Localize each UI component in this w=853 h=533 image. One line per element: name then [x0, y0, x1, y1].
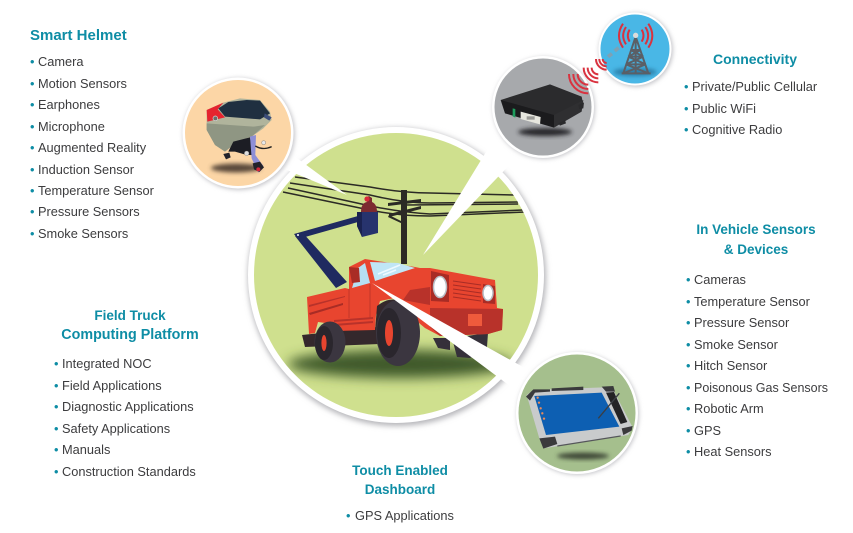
- text block: In Vehicle Sensors and Devices: Hitch Sensor: [694, 358, 768, 373]
- text block: Field Truck Computing Platform: •: [54, 356, 58, 371]
- text block: Touch Enabled Dashboard: GPS Applications: [355, 508, 454, 523]
- chassis: [302, 327, 380, 347]
- bucket: [357, 212, 378, 237]
- power lines: [283, 177, 525, 216]
- text block: In Vehicle Sensors and Devices: •: [686, 444, 690, 459]
- far front wheels: [433, 333, 488, 358]
- text block: In Vehicle Sensors and Devices: •: [686, 401, 690, 416]
- text block: In Vehicle Sensors and Devices: •: [686, 380, 690, 395]
- pointer: tablet to truck: [372, 283, 532, 392]
- icon: vehicle gateway device circle: [492, 56, 595, 159]
- text block: Smart Helmet: [30, 27, 155, 241]
- rear wheel: [314, 322, 346, 362]
- text block: In Vehicle Sensors and Devices: Smoke Sensor: [694, 337, 779, 352]
- text block: In Vehicle Sensors and Devices: •: [686, 272, 690, 287]
- text block: Field Truck Computing Platform: Field Applications: [62, 378, 162, 393]
- text block: Connectivity: •: [684, 101, 688, 116]
- text block: Touch Enabled Dashboard: Touch Enabled: [352, 463, 448, 478]
- text block: Connectivity: •: [684, 79, 688, 94]
- worker: [361, 196, 377, 212]
- text block: Field Truck Computing Platform: Integrated NOC: [62, 356, 152, 371]
- boom arm: [294, 216, 358, 288]
- text block: In Vehicle Sensors and Devices: Heat Sensors: [694, 444, 772, 459]
- text block: In Vehicle Sensors and Devices: •: [686, 337, 690, 352]
- text block: Field Truck Computing Platform: Construction Standards: [62, 464, 196, 479]
- grille bars: [453, 281, 481, 301]
- text block: In Vehicle Sensors and Devices: Cameras: [694, 272, 746, 287]
- text block: Smart Helmet: •: [30, 76, 34, 91]
- text block: Field Truck Computing Platform: Diagnostic Applications: [62, 399, 194, 414]
- button strip: [606, 392, 627, 424]
- central illustration: bucket truck in green circle: [248, 127, 546, 426]
- text block: In Vehicle Sensors and Devices: Robotic Arm: [694, 401, 764, 416]
- front wheel: [376, 300, 420, 366]
- text block: In Vehicle Sensors and Devices: Pressure Sensor: [694, 315, 790, 330]
- icon: rugged tablet circle: [516, 352, 639, 475]
- text block: Connectivity: Cognitive Radio: [692, 122, 782, 137]
- windshield: [370, 262, 415, 281]
- wheel arch: [375, 299, 420, 332]
- text block: Smart Helmet: Temperature Sensor: [38, 183, 155, 198]
- text block: Smart Helmet: •: [30, 226, 34, 241]
- text block: Smart Helmet: •: [30, 140, 34, 155]
- text block: Field Truck Computing Platform: •: [54, 378, 58, 393]
- utility pole: [388, 190, 421, 264]
- darker red panels: [430, 308, 503, 336]
- text block: Field Truck Computing Platform: •: [54, 464, 58, 479]
- headlights: [434, 276, 446, 298]
- text block: In Vehicle Sensors and Devices: •: [686, 423, 690, 438]
- text block: Touch Enabled Dashboard: Dashboard: [365, 482, 435, 497]
- text block: Smart Helmet: Induction Sensor: [38, 162, 135, 177]
- text block: Smart Helmet: Motion Sensors: [38, 76, 127, 91]
- text block: In Vehicle Sensors and Devices: Temperature Sensor: [694, 294, 811, 309]
- text block: Field Truck Computing Platform: Computing Platform: [61, 327, 199, 343]
- text block: Touch Enabled Dashboard: •: [346, 508, 350, 523]
- text block: In Vehicle Sensors and Devices: •: [686, 315, 690, 330]
- text block: Connectivity: Connectivity: [713, 51, 797, 67]
- grille frame: [431, 271, 449, 302]
- text block: Field Truck Computing Platform: •: [54, 442, 58, 457]
- text block: In Vehicle Sensors and Devices: & Devices: [724, 242, 788, 257]
- license plate: [468, 314, 482, 326]
- text block: Connectivity: Public WiFi: [692, 101, 756, 116]
- text block: In Vehicle Sensors and Devices: In Vehicle Sensors: [696, 222, 816, 237]
- text block: Connectivity: [684, 51, 818, 137]
- text block: Field Truck Computing Platform: Field Truck: [94, 308, 166, 323]
- icon: cell tower circle: [598, 12, 673, 87]
- text block: In Vehicle Sensors and Devices: [686, 222, 828, 459]
- pointer: device to truck: [423, 134, 520, 255]
- text block: Smart Helmet: Earphones: [38, 97, 100, 112]
- tower: [622, 37, 651, 73]
- text block: Smart Helmet: Microphone: [38, 119, 105, 134]
- text block: Field Truck Computing Platform: [54, 308, 199, 479]
- text block: Smart Helmet: Smart Helmet: [30, 27, 127, 44]
- text block: Smart Helmet: •: [30, 204, 34, 219]
- truck body: [307, 259, 503, 336]
- tower signal waves: [619, 24, 652, 48]
- text block: Smart Helmet: Camera: [38, 54, 84, 69]
- text block: Field Truck Computing Platform: Manuals: [62, 442, 110, 457]
- icon: smart helmet circle: [182, 78, 295, 190]
- text block: In Vehicle Sensors and Devices: Poisonous Gas Sensors: [694, 380, 828, 395]
- text block: Field Truck Computing Platform: •: [54, 399, 58, 414]
- ground shadow: [288, 350, 512, 378]
- text block: Smart Helmet: •: [30, 54, 34, 69]
- text block: In Vehicle Sensors and Devices: GPS: [694, 423, 721, 438]
- text block: Smart Helmet: •: [30, 119, 34, 134]
- text block: Field Truck Computing Platform: •: [54, 421, 58, 436]
- text block: Smart Helmet: Augmented Reality: [38, 140, 147, 155]
- text block: In Vehicle Sensors and Devices: •: [686, 358, 690, 373]
- text block: Connectivity: Private/Public Cellular: [692, 79, 818, 94]
- icon: wireless signal waves from device to tower: [569, 48, 619, 93]
- text block: Smart Helmet: •: [30, 97, 34, 112]
- text block: Smart Helmet: Pressure Sensors: [38, 204, 140, 219]
- text block: Smart Helmet: •: [30, 183, 34, 198]
- text block: Connectivity: •: [684, 122, 688, 137]
- text block: Smart Helmet: •: [30, 162, 34, 177]
- stylus: [598, 393, 619, 418]
- text block: Field Truck Computing Platform: Safety Applications: [62, 421, 170, 436]
- text block: In Vehicle Sensors and Devices: •: [686, 294, 690, 309]
- pointer: helmet to truck: [282, 153, 347, 195]
- text block: Touch Enabled Dashboard: [346, 463, 454, 523]
- tablet screen: [534, 393, 619, 435]
- side window: [352, 263, 370, 288]
- side mirror: [349, 267, 360, 283]
- text block: Smart Helmet: Smoke Sensors: [38, 226, 128, 241]
